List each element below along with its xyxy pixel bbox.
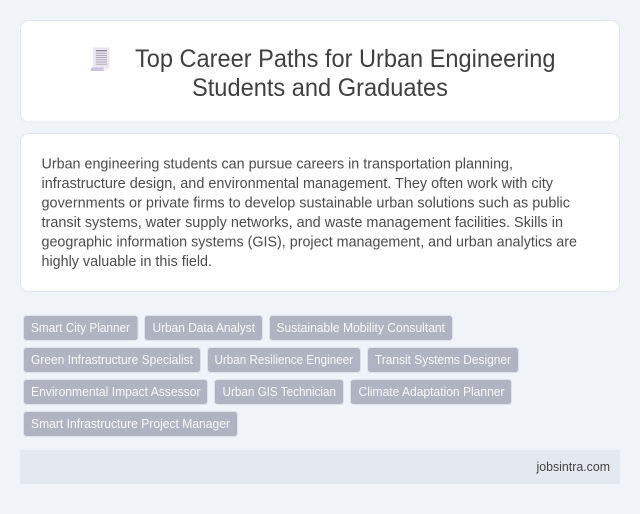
text block: description: Urban engineering students can pursue careers in transportation planning,	[42, 156, 513, 172]
panel: header card	[20, 20, 620, 122]
tag: Environmental Impact Assessor: Environmental Impact Assessor	[31, 385, 200, 399]
title: Students and Graduates	[192, 74, 448, 102]
tag: Urban GIS Technician	[214, 380, 344, 404]
icon: document scroll	[90, 48, 110, 71]
title: Top Career Paths for Urban Engineering	[135, 45, 556, 73]
tag: Green Infrastructure Specialist	[24, 348, 200, 372]
tag: Smart Infrastructure Project Manager	[24, 412, 238, 436]
text block: description: infrastructure design, and environmental management. They often work with city	[42, 176, 554, 192]
tag: Smart Infrastructure Project Manager: Smart Infrastructure Project Manager	[31, 417, 230, 431]
tag list: career paths	[24, 316, 518, 436]
title	[135, 45, 556, 102]
tag: Transit Systems Designer	[368, 348, 518, 372]
tag: Sustainable Mobility Consultant: Sustainable Mobility Consultant	[276, 321, 446, 335]
tag: Smart City Planner: Smart City Planner	[31, 321, 130, 335]
text block: description	[42, 156, 577, 270]
tag: Sustainable Mobility Consultant	[270, 316, 452, 340]
tag: Urban Resilience Engineer	[208, 348, 360, 372]
text block: description: geographic information systems (GIS), project management, and urban analytics are	[42, 234, 577, 250]
footer text: source: jobsintra.com	[536, 460, 610, 474]
tag: Urban Data Analyst: Urban Data Analyst	[152, 321, 255, 335]
tag: Urban GIS Technician: Urban GIS Technician	[222, 385, 336, 399]
text block: description: governments or private firms to develop sustainable urban solutions such as public	[42, 196, 570, 212]
tag: Climate Adaptation Planner	[350, 380, 512, 404]
tag: Urban Resilience Engineer: Urban Resilience Engineer	[214, 353, 353, 367]
text block: description: highly valuable in this field.	[42, 254, 212, 270]
tag: Urban Data Analyst	[144, 316, 262, 340]
footer bar	[20, 450, 620, 484]
panel: description card	[20, 134, 620, 292]
tag: Climate Adaptation Planner: Climate Adaptation Planner	[358, 385, 504, 399]
tag: Transit Systems Designer: Transit Systems Designer	[375, 353, 511, 367]
tag: Environmental Impact Assessor	[24, 380, 208, 404]
text block: description: transit systems, water supply networks, and waste management facilities. Skills in	[42, 215, 563, 231]
tag: Smart City Planner	[24, 316, 138, 340]
tag: Green Infrastructure Specialist: Green Infrastructure Specialist	[31, 353, 194, 367]
